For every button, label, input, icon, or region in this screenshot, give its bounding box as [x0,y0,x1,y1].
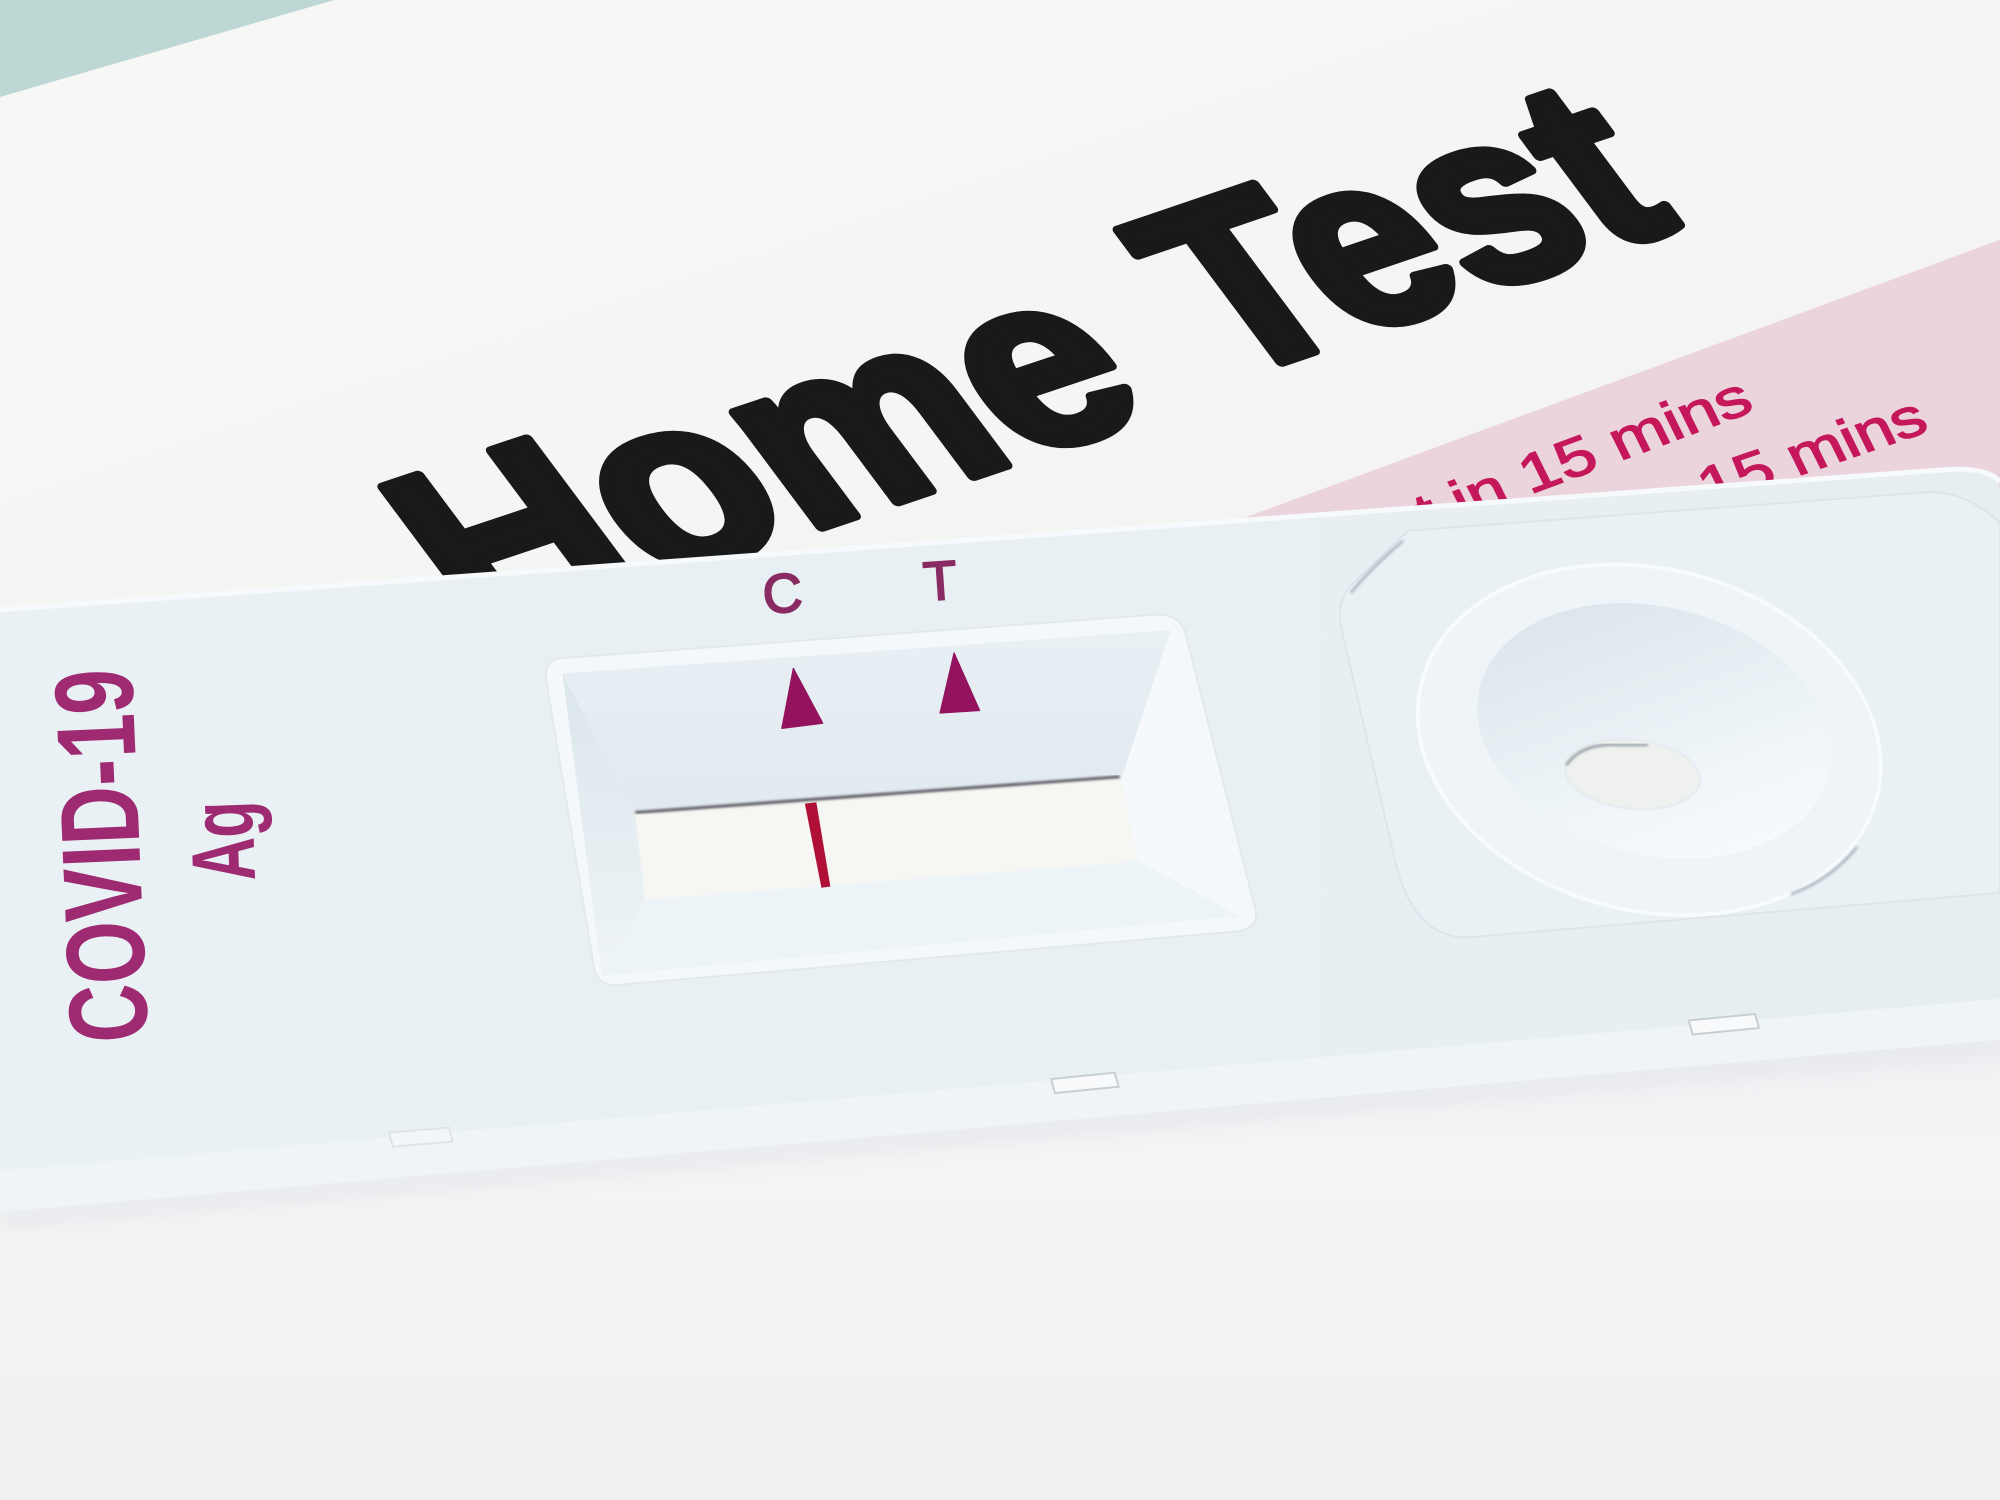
test kit box [0,0,2000,687]
sample well [1340,492,2000,962]
strip top shadow [635,777,1120,812]
box surface [0,0,2000,663]
box heading word: Home: Home [332,218,1191,687]
window right slope [1122,630,1240,916]
edge notch left [389,1128,453,1147]
C arrow [782,668,823,728]
window lower slope [602,861,1240,976]
window outer rim [546,615,1256,985]
cassette label: Ag: Ag [172,800,275,883]
pink text line two: 15 mins [1687,386,1937,518]
cassette shadow [0,1040,2000,1224]
control marker letter C: C [761,561,804,625]
T arrow [940,653,980,713]
table surface [0,969,2000,1500]
window left slope [562,673,645,976]
well recess [1340,492,2000,938]
ring lower shadow [1791,847,1857,894]
top edge highlight [0,469,2000,610]
edge notch middle [1051,1073,1119,1093]
cassette label: COVID-19: COVID-19 [31,667,172,1045]
recess corner shadow [1351,541,1403,593]
pink corner band [1237,240,2000,536]
sample hole [1562,733,1703,816]
control line [805,802,830,888]
cassette body [0,469,2000,1212]
well ring [1380,517,1918,962]
edge notch right [1689,1014,1759,1034]
box heading word: Test: Test [1082,31,1718,426]
test cassette [0,469,2000,1212]
teal background corner [0,0,383,128]
test marker letter T: T [921,549,959,613]
cassette side wall [0,999,2000,1212]
well bowl [1450,567,1859,894]
hole shadow [1566,745,1648,765]
pink text line one: t in 15 mins [1404,366,1761,544]
window upper slope [562,630,1171,811]
reading window [546,615,1256,985]
test strip [635,776,1138,899]
